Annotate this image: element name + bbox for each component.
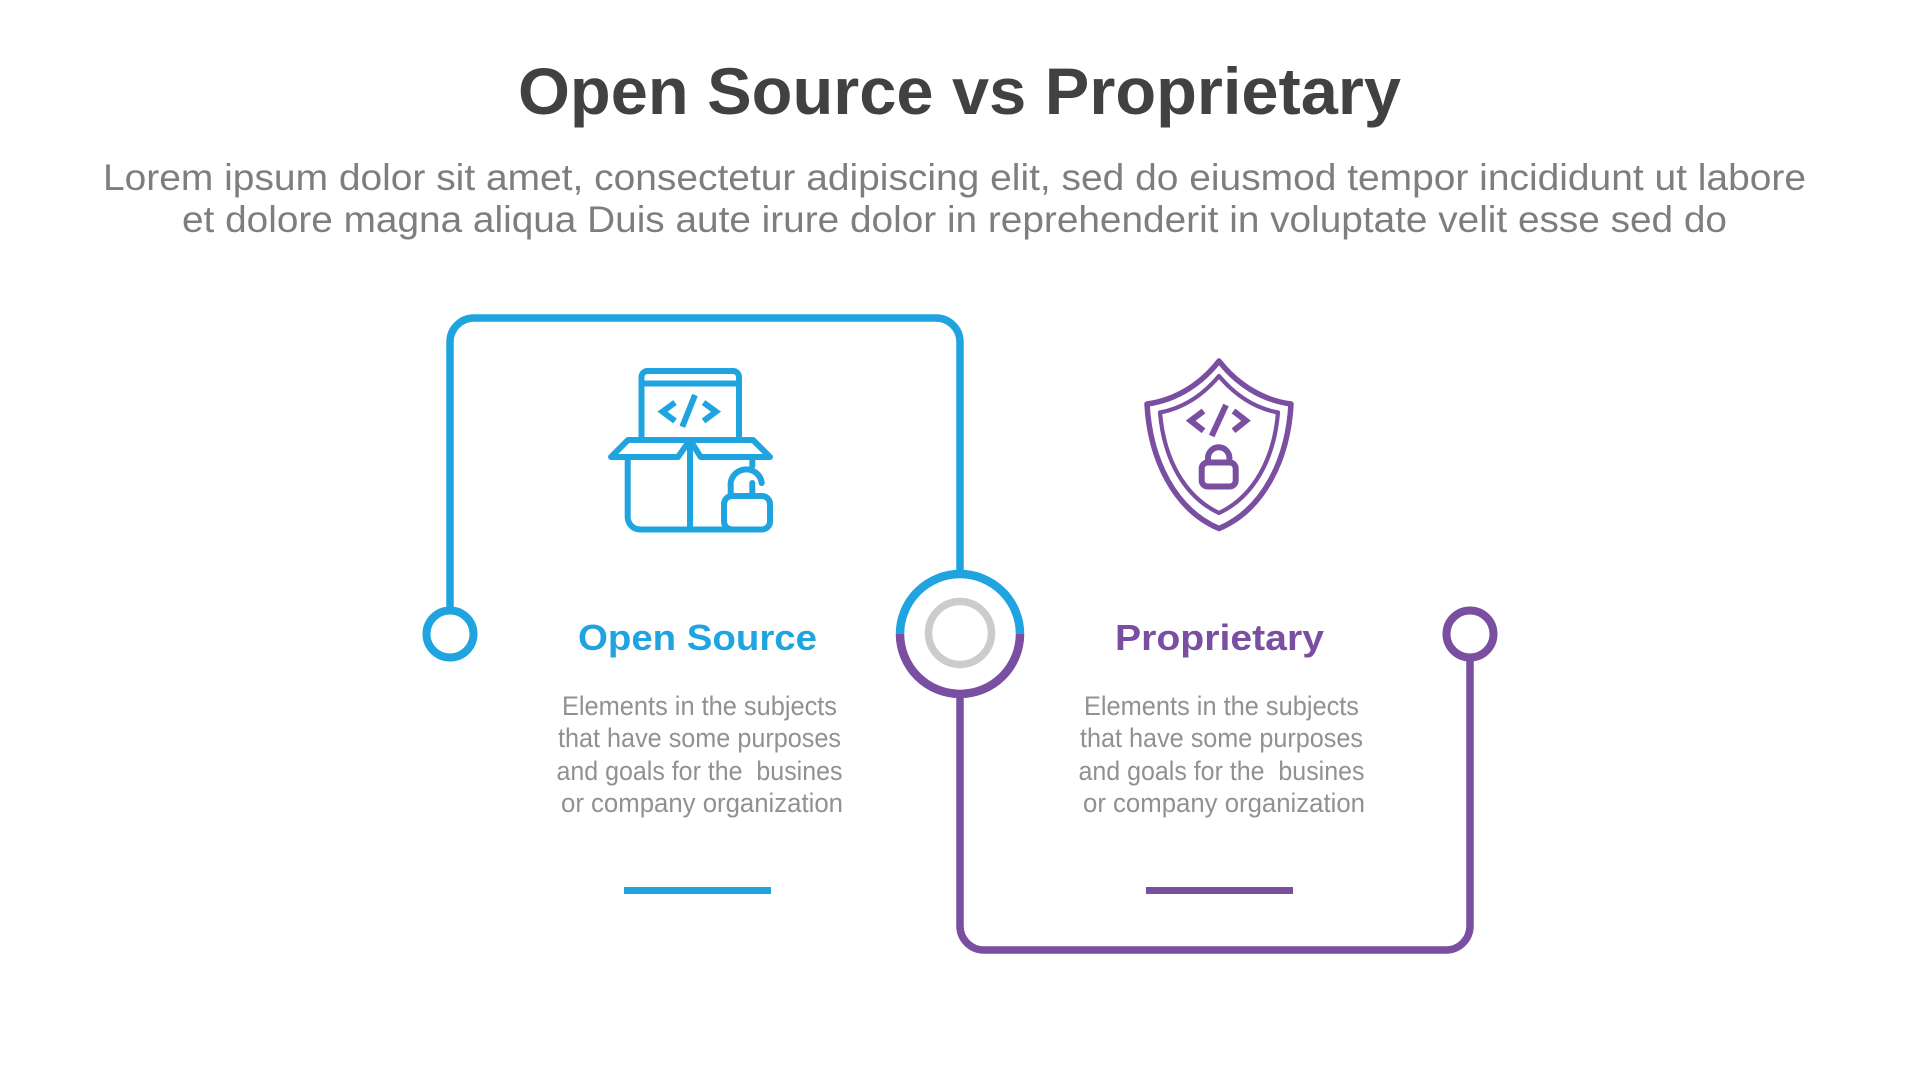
- text block: open source description: and goals for the busines: [556, 756, 842, 786]
- accent bar: open source: [624, 887, 771, 894]
- subtitle text block: et dolore magna aliqua Duis aute irure dolor in reprehenderit in voluptate velit esse sed do: [182, 199, 1727, 240]
- text block: open source description: that have some purposes: [558, 723, 841, 753]
- text block: proprietary description: [1078, 691, 1365, 818]
- subtitle text block: [103, 157, 1806, 240]
- central connector ring: [900, 574, 1020, 694]
- panel: proprietary outline: [960, 660, 1470, 950]
- text block: open source description: or company organization: [561, 788, 843, 818]
- text block: proprietary description: that have some purposes: [1080, 723, 1363, 753]
- panel: open source outline: [450, 318, 960, 610]
- text block: proprietary description: Elements in the subjects: [1084, 691, 1359, 721]
- subtitle text block: Lorem ipsum dolor sit amet, consectetur adipiscing elit, sed do eiusmod tempor incididunt ut labore: [103, 157, 1806, 198]
- accent bar: proprietary: [1146, 887, 1293, 894]
- text block: open source description: Elements in the subjects: [562, 691, 837, 721]
- heading: proprietary: Proprietary: [1115, 617, 1324, 658]
- text block: proprietary description: and goals for the busines: [1078, 756, 1364, 786]
- node: open source start circle: [426, 610, 474, 658]
- title: Open Source vs Proprietary: [518, 54, 1401, 128]
- icon: shield with code and padlock: [1147, 361, 1291, 528]
- icon: open box with code window and unlocked padlock: [611, 371, 770, 530]
- node: proprietary end circle: [1446, 610, 1494, 658]
- heading: open source: Open Source: [578, 617, 817, 658]
- text block: open source description: [556, 691, 843, 818]
- text block: proprietary description: or company organization: [1083, 788, 1365, 818]
